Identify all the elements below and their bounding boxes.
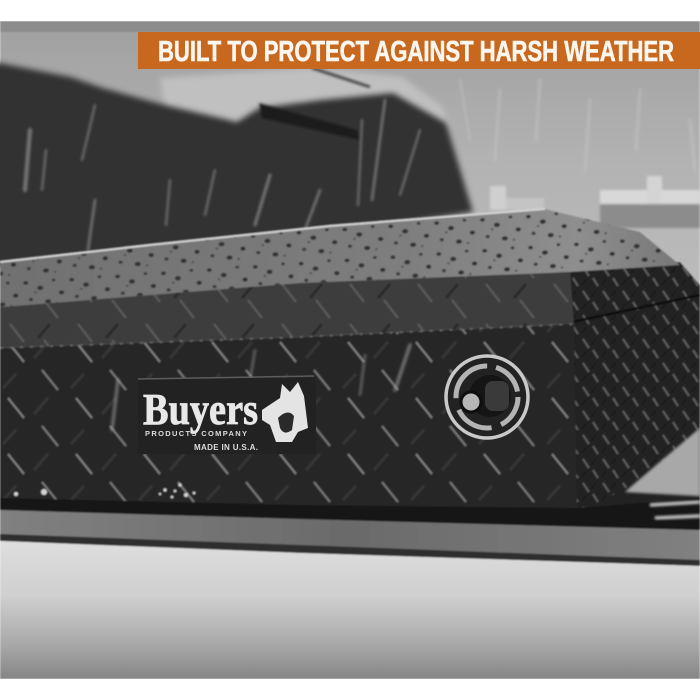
truck cab silhouette xyxy=(0,60,473,270)
tool box front panel diamond plate xyxy=(0,324,577,516)
ledge under tool box xyxy=(0,502,700,566)
dark shadow under box xyxy=(0,498,700,535)
logo wordmark: Buyers xyxy=(143,385,258,434)
foreground surface xyxy=(0,541,700,679)
tool box lid front edge xyxy=(0,272,574,348)
logo plate: Buyers xyxy=(138,376,316,454)
logo subline: PRODUCTS COMPANY xyxy=(145,429,247,438)
tool box side panel xyxy=(560,262,700,530)
distant building xyxy=(490,176,700,228)
water splashes on plate xyxy=(14,483,195,498)
rain streaks lower xyxy=(112,345,410,430)
rain streaks upper xyxy=(25,80,695,250)
logo bulldog icon xyxy=(262,382,308,442)
logo made in USA: MADE IN U.S.A. xyxy=(194,443,258,452)
banner: orange headline xyxy=(138,32,700,69)
rainy sky background xyxy=(0,21,700,301)
lock dial xyxy=(446,356,528,438)
tool box lid top with water droplets xyxy=(0,209,680,307)
